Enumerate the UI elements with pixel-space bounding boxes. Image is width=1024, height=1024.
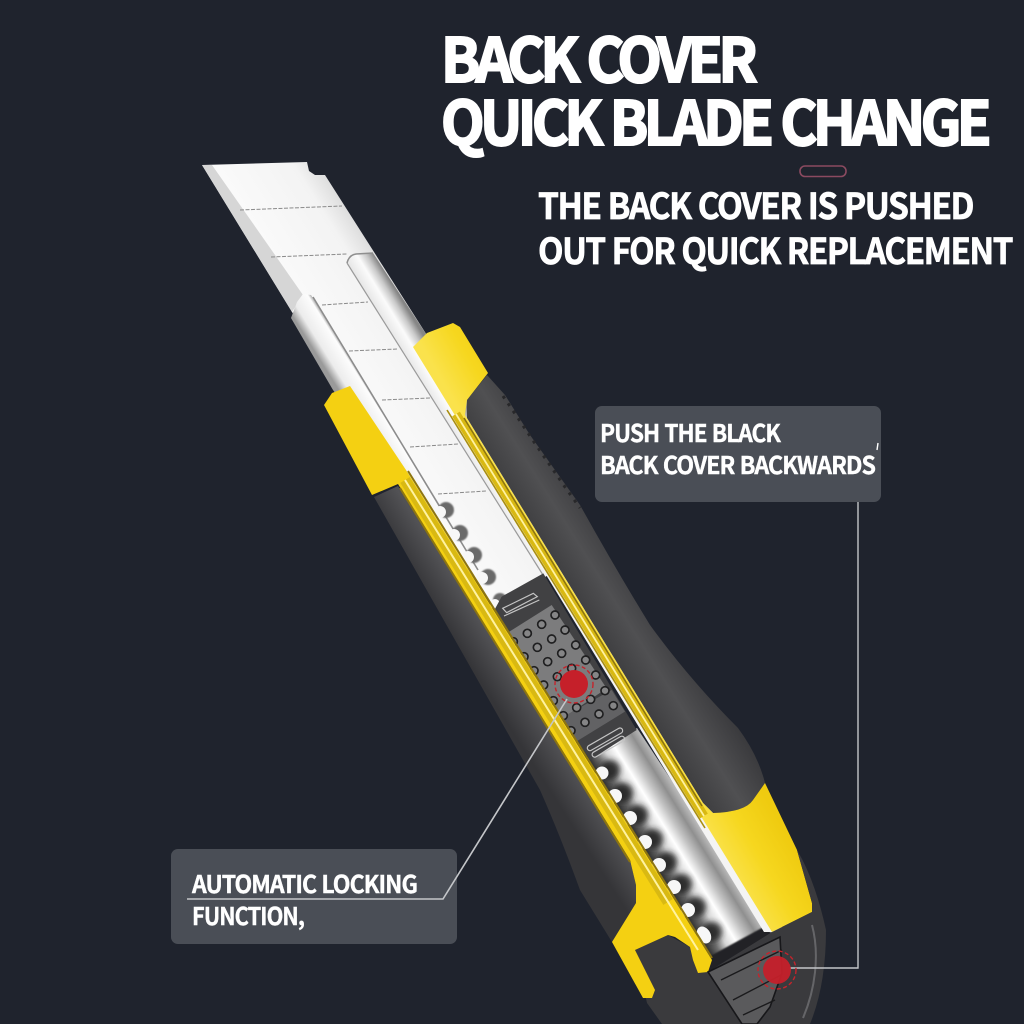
callout box: automatic locking bbox=[171, 849, 457, 944]
left rubber grip bbox=[374, 486, 636, 942]
callout box: automatic locking: FUNCTION, bbox=[192, 897, 304, 932]
body highlight arc bbox=[803, 925, 816, 1018]
subtitle: THE BACK COVER IS PUSHED bbox=[538, 178, 973, 230]
decorative pill bbox=[800, 166, 846, 176]
callout box: push the black back cover: BACK COVER BACKWARDS bbox=[600, 446, 876, 481]
title bbox=[441, 11, 988, 163]
left strip shading bbox=[400, 471, 712, 958]
lower metal track bbox=[584, 728, 772, 972]
right rubber grip bbox=[467, 375, 765, 813]
illustration: utility knife bbox=[202, 162, 826, 1024]
left edge line along rail bbox=[313, 297, 478, 570]
rear ribbed push button bbox=[708, 937, 782, 1024]
white metal edge bbox=[540, 565, 785, 932]
marker: slider red dot bbox=[555, 665, 593, 703]
lower handle body bbox=[635, 850, 826, 1024]
left yellow housing bbox=[324, 386, 712, 998]
right yellow housing bbox=[413, 323, 812, 932]
right strip shading bbox=[447, 410, 705, 828]
callout box: push the black back cover: PUSH THE BLACK bbox=[600, 414, 781, 449]
callout box: automatic locking: AUTOMATIC LOCKING bbox=[191, 865, 417, 900]
callout box: push the black back cover bbox=[595, 406, 881, 502]
left metal rail bbox=[291, 294, 440, 515]
subtitle bbox=[538, 178, 1013, 275]
marker: rear button red dot bbox=[758, 951, 796, 989]
knife blade bbox=[202, 162, 548, 612]
right grip serrated edge bbox=[503, 396, 580, 508]
rail top edge bbox=[347, 253, 373, 263]
sliding thumb button bbox=[492, 573, 637, 760]
blade locking notches bbox=[434, 502, 507, 609]
title: QUICK BLADE CHANGE bbox=[441, 74, 988, 163]
leader line: rear marker to callout bbox=[790, 502, 858, 968]
title: BACK COVER bbox=[441, 11, 757, 100]
leader line: locking marker to callout bbox=[187, 699, 567, 899]
right metal rail bbox=[347, 253, 575, 575]
dark line along blade edge bbox=[347, 263, 543, 575]
